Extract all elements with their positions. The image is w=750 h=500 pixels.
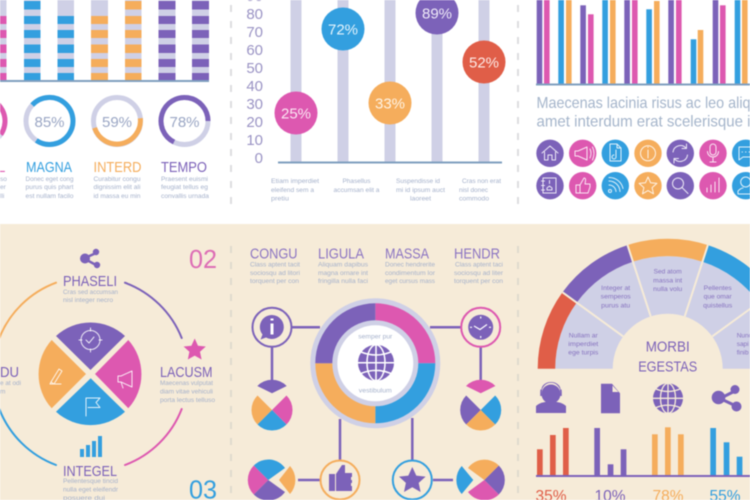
gauge: 78%	[161, 97, 208, 144]
captions: Phasellus	[342, 178, 371, 185]
label: INTERD	[94, 159, 142, 200]
ring: purple	[562, 245, 633, 303]
gauge: 78%: 78%	[169, 114, 200, 131]
icon: refresh	[667, 140, 694, 167]
panel: bubble chart	[246, 0, 506, 202]
icon: document	[602, 140, 629, 167]
donut segments	[315, 303, 435, 423]
wedge: flag	[56, 378, 125, 425]
label: INTEGEL: Pellentesque tincid	[63, 478, 118, 485]
bubble 89%	[416, 0, 458, 34]
ring arcs	[0, 283, 182, 465]
label: INTERD: INTERD	[94, 159, 142, 176]
bubble 33%: 33%	[375, 96, 405, 112]
label: CONGU	[250, 246, 300, 285]
icon: address book	[536, 172, 564, 199]
icon: microphone	[699, 140, 727, 167]
bubble 72%: 72%	[328, 22, 358, 38]
label: cropped left column: er	[0, 184, 7, 191]
y axis numbers: 70	[246, 24, 263, 41]
label: MAGNA: MAGNA	[26, 159, 72, 176]
y axis numbers: 30	[246, 96, 263, 113]
sector text: nulla volu	[653, 286, 683, 293]
label: CONGU: CONGU	[250, 246, 298, 262]
panel: striped bar chart	[0, 0, 209, 82]
label: LACUSM: diam vitae vehiculi	[160, 388, 213, 396]
icon: megaphone	[569, 140, 596, 167]
sector text: cropped right: sapi	[737, 341, 749, 348]
bubble 33%	[368, 82, 412, 124]
sector text: Sed atom	[654, 268, 682, 276]
label: HENDR: torquent per con	[454, 278, 503, 285]
label: cropped left column	[0, 159, 7, 200]
label: MASSA: condimentum lor	[385, 270, 436, 277]
captions	[271, 178, 501, 202]
label: HENDR: HENDR	[454, 246, 500, 262]
columns	[290, 0, 490, 162]
y axis numbers: 10	[246, 132, 263, 149]
y axis numbers: 40	[246, 78, 263, 95]
icon: headset user	[536, 382, 566, 413]
y axis numbers: 20	[246, 114, 263, 131]
icon: user	[732, 172, 750, 199]
wedge: clock	[56, 323, 125, 370]
y axis numbers: 0	[255, 150, 263, 167]
wedge: pencil	[39, 340, 86, 408]
icon: info	[634, 140, 662, 167]
label: HENDR	[454, 246, 504, 285]
title: MORBI EGESTAS: EGESTAS	[638, 359, 697, 376]
ring: blue	[702, 245, 750, 303]
bubble 52%: 52%	[469, 54, 499, 72]
sector text	[568, 268, 733, 356]
title: MORBI EGESTAS: MORBI	[646, 339, 690, 356]
node: clock	[461, 308, 500, 347]
label: cropped left column: lli	[0, 193, 4, 200]
bubble 89%: 89%	[422, 6, 452, 22]
sector text: ege turpis	[568, 350, 599, 356]
icon: star outline	[634, 172, 662, 199]
icon: document	[601, 384, 620, 413]
label: INTEGEL: nulla eget eleifendr	[63, 486, 119, 494]
sector text: quistellus	[703, 302, 733, 310]
label: LIGULA: magna ornare int	[318, 270, 368, 277]
central donut: semper pur	[358, 334, 393, 340]
icon: share	[712, 385, 742, 412]
label: TEMPO	[161, 159, 209, 200]
label: PHASELI: Cras sed accumsan	[63, 289, 118, 296]
title: MORBI EGESTAS	[638, 339, 697, 376]
sector text: massa int	[653, 278, 682, 284]
label: TEMPO: convallis urnada	[161, 193, 209, 200]
mini pie: bottom left	[248, 459, 295, 500]
icon: bars	[80, 436, 102, 457]
sector text: que omar	[704, 294, 733, 301]
sector text: cropped right	[737, 332, 750, 356]
label: LACUSM: LACUSM	[160, 364, 212, 381]
label: TEMPO: TEMPO	[161, 159, 207, 176]
captions: nisl donec	[459, 187, 489, 194]
captions: eleifend sem a	[271, 187, 314, 194]
label: LIGULA: Aliquam dapibus	[318, 262, 369, 268]
wedge: megaphone	[95, 340, 141, 408]
sector text: cropped right: finib	[737, 350, 749, 356]
label: cropped DU: m	[0, 388, 5, 396]
sector text: Pellentes	[704, 285, 732, 292]
icon: chat	[732, 140, 750, 167]
mini pie: top right	[460, 380, 501, 431]
label: LACUSM: Maecenas vulputat	[160, 380, 213, 387]
label: LIGULA: LIGULA	[318, 246, 364, 262]
bubble 25%: 25%	[281, 106, 311, 122]
icon: signal bars	[699, 172, 727, 199]
label: PHASELI: nisl integer necro	[63, 297, 113, 304]
gauge: pink partial	[0, 98, 5, 144]
label: MAGNA: Donec eget cong	[26, 176, 74, 183]
captions: Suspendisse id	[396, 178, 440, 185]
number 02: 02	[189, 244, 217, 274]
label: cropped DU: e at odi	[0, 380, 21, 387]
y axis numbers: 80	[246, 6, 263, 23]
label: MAGNA: est nullam facilo	[26, 193, 74, 200]
panel: icon grid	[536, 140, 750, 199]
sector text: purus atu	[601, 302, 631, 310]
panel: hub diagram	[248, 246, 505, 500]
label: MASSA	[385, 246, 436, 285]
label: MASSA: MASSA	[385, 246, 429, 262]
mini pie: bottom right	[456, 460, 505, 500]
y axis numbers	[246, 0, 263, 167]
connectors	[272, 327, 481, 480]
blue stripes	[24, 1, 74, 81]
label: cropped left column: so	[0, 176, 7, 183]
label: MAGNA: purus quis phart	[26, 184, 74, 191]
captions: Cras non erat	[462, 178, 501, 185]
label: PHASELI	[63, 273, 118, 304]
captions: mi id ipsum auct	[396, 187, 445, 194]
label: INTERD: Curabitur congu	[94, 176, 141, 183]
captions: commodo	[459, 196, 489, 202]
panel: grouped bars	[536, 427, 750, 477]
label: INTEGEL	[63, 463, 119, 500]
bubble 72%	[322, 8, 364, 50]
central donut	[310, 298, 440, 428]
label: LIGULA: fringilla nulla faci	[318, 278, 368, 285]
label: CONGU: sociosqu ad litori	[250, 270, 300, 277]
mini pie: top left	[251, 380, 293, 431]
panel: percentage gauges	[0, 97, 208, 144]
label: INTERD: dignissim elit ali	[94, 184, 140, 191]
label: CONGU: Class aptent tacit	[250, 262, 300, 268]
icon: wifi	[602, 172, 629, 199]
label: INTEGEL: INTEGEL	[63, 463, 117, 480]
label: PHASELI: PHASELI	[63, 273, 117, 290]
node: thumb up	[320, 460, 360, 500]
captions: accumsan elit a	[334, 187, 380, 194]
y axis numbers: 50	[246, 60, 263, 77]
node: star	[393, 460, 432, 500]
ring: red	[538, 292, 577, 369]
central donut: vestibulum	[359, 388, 392, 394]
node: info	[252, 308, 292, 347]
bubble 25%	[274, 92, 318, 134]
label: LACUSM	[160, 364, 215, 404]
label: HENDR: sociosqu ad liter	[454, 270, 504, 277]
text block: Maecenas	[536, 95, 750, 130]
gauge: 59%	[94, 98, 140, 144]
sector text: Nullam ar	[569, 332, 599, 340]
gauge: 59%: 59%	[102, 114, 132, 131]
panel: semicircle diagram	[538, 239, 750, 376]
label: TEMPO: feugiat tellus eg	[161, 184, 208, 191]
inner sectors	[555, 256, 750, 369]
icon: globe	[358, 345, 394, 381]
sector text: Integer at	[601, 285, 630, 292]
gauge labels	[0, 159, 209, 200]
ring: orange	[628, 239, 708, 262]
label: HENDR: Class aptent taci	[455, 262, 503, 268]
label: LACUSM: porta lectus telluso	[160, 397, 215, 404]
bubble 52%	[462, 40, 506, 84]
label: MASSA: Donec hendrerite	[385, 262, 435, 268]
y axis numbers: 60	[246, 42, 263, 59]
gauge: 85%: 85%	[34, 114, 65, 131]
label: CONGU: torquent per con	[250, 278, 299, 285]
pink stripes	[0, 16, 6, 81]
label: MAGNA	[26, 159, 74, 200]
captions: laoreet	[410, 196, 431, 202]
label: MASSA: eget cursus mass	[385, 278, 436, 285]
icon: globe	[653, 383, 683, 413]
purple stripes	[158, 1, 209, 81]
percent labels	[535, 488, 741, 500]
orange stripes	[91, 1, 142, 81]
label: LIGULA	[318, 246, 369, 285]
panel: paired bar chart	[536, 0, 750, 86]
icon: star	[184, 338, 206, 360]
icon: home	[536, 140, 564, 167]
label: INTERD: id massa eu min	[94, 193, 141, 200]
icon: thumb up	[569, 172, 596, 199]
label: cropped DU: DU	[0, 364, 19, 381]
captions: Etiam imperdiet	[271, 178, 319, 185]
sector text: semperos	[601, 294, 631, 301]
panel: circular process diagram	[0, 244, 217, 500]
label: TEMPO: Praesent euismi	[161, 176, 208, 183]
gauge: 85%	[26, 97, 73, 144]
label: cropped DU	[0, 364, 21, 396]
captions: pretiu	[271, 196, 289, 202]
icon: magnifier	[667, 172, 694, 199]
icon: share	[80, 249, 100, 268]
sector text: imperdiet	[568, 341, 599, 348]
